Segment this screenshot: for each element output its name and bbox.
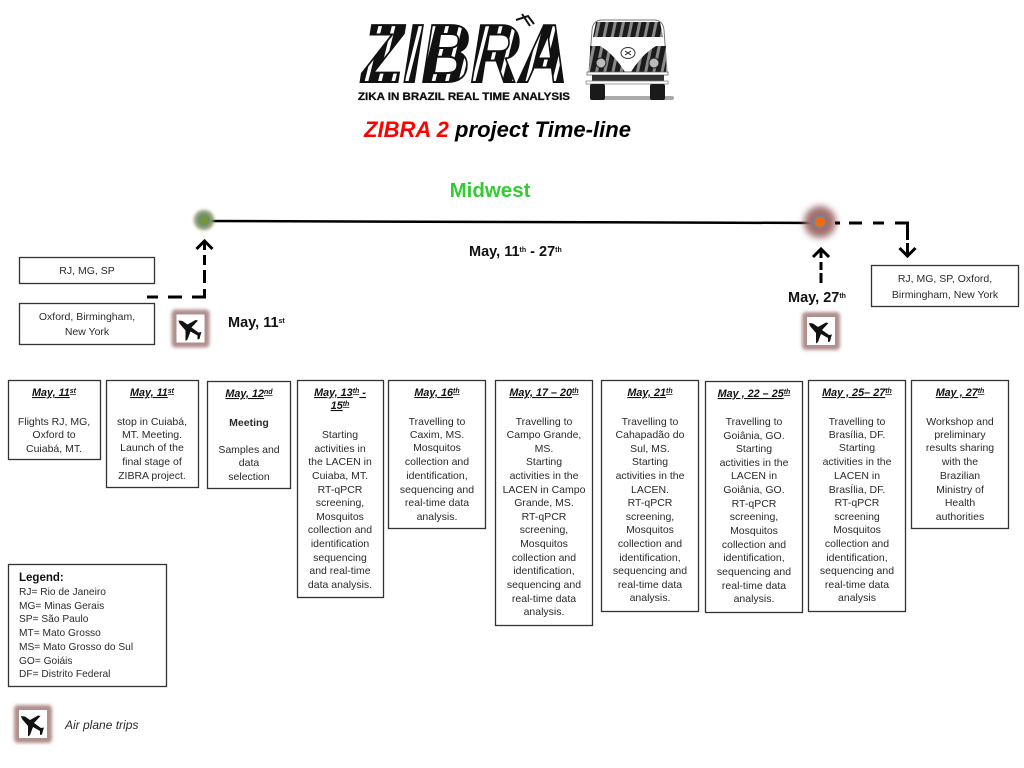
title: ZIBRA 2 project Time-line <box>363 117 631 142</box>
departure date: May, 27 <box>788 290 839 306</box>
panel: May 16: May, 16 <box>414 387 453 399</box>
panel: May 11 flights: Oxford to <box>32 429 76 441</box>
panel: May 11 stop: Launch of the <box>120 442 184 454</box>
panel: May 11 flights: st <box>70 388 77 395</box>
panel: May 16: Travelling to <box>409 416 466 428</box>
panel: May 25-27: sequencing and <box>820 565 894 577</box>
panel: May 13-15: RT-qPCR <box>318 484 363 496</box>
panel: May 16: identification, <box>406 470 468 482</box>
panel: May 13-15: sequencing <box>313 552 367 564</box>
panel: May 16 <box>388 380 486 528</box>
panel: May 13-15: 15 <box>331 400 343 412</box>
timeline date range: th <box>520 247 526 254</box>
panel: May 12 meeting: Samples and <box>218 444 280 456</box>
panel: May 16: analysis. <box>417 511 457 523</box>
panel: legend: MT= Mato Grosso <box>19 628 101 639</box>
panel: May 21: Cahapadão do <box>616 429 685 441</box>
panel: May 27 workshop: results sharing <box>926 442 994 454</box>
panel: May 21: real-time data <box>618 579 682 591</box>
panel: May 13-15: collection and <box>308 524 372 536</box>
panel: May 11 flights: May, 11 <box>32 387 70 399</box>
panel: May 22-25: Mosquitos <box>730 525 778 537</box>
panel: May 16: sequencing and <box>400 484 474 496</box>
panel: May 22-25: Goiânia, GO. <box>723 430 785 442</box>
box: return destinations: RJ, MG, SP, Oxford, <box>898 273 992 285</box>
panel: May 13-15: identification <box>311 538 369 550</box>
panel: May 13-15: and real-time <box>309 565 371 577</box>
panel: May 17-20: Starting <box>526 456 562 468</box>
panel: May 21: Travelling to <box>622 416 679 428</box>
panel: May 21: LACEN. <box>631 484 669 496</box>
panel: May 25-27: activities in the <box>823 456 892 468</box>
panel: May 16: th <box>453 388 460 395</box>
arrival date: May, 11 <box>228 315 279 331</box>
panel: May 22-25: Starting <box>736 443 772 455</box>
panel: May 13-15: May, 13 <box>314 387 353 399</box>
panel: May 16: Mosquitos <box>413 442 461 454</box>
panel: May 17-20: Campo Grande, <box>507 429 581 441</box>
panel: May 22-25: RT-qPCR <box>732 498 777 510</box>
panel: May 25-27: LACEN in <box>834 470 880 482</box>
timeline date range: May, 11 <box>469 244 520 260</box>
panel: May 11 stop: ZIBRA project. <box>118 470 186 482</box>
panel: May 12 meeting: selection <box>228 471 270 483</box>
box: Oxford, Birmingham, New York: New York <box>65 326 110 338</box>
panel: May 12 meeting: May, 12 <box>225 388 264 400</box>
timeline line <box>204 221 820 223</box>
panel: May 17-20: real-time data <box>512 593 576 605</box>
panel: May 27 workshop: with the <box>941 456 978 468</box>
panel: May 22-25: analysis. <box>734 593 774 605</box>
panel: May 13-15: the LACEN in <box>308 456 372 468</box>
panel: May 17-20: MS. <box>535 443 553 455</box>
panel: May 21: identification, <box>619 552 681 564</box>
panel: May 17-20: collection and <box>512 552 576 564</box>
panel: May 25-27: Brasília, DF. <box>829 429 885 441</box>
panel: May 25-27: Travelling to <box>829 416 886 428</box>
panel: May 21: Starting <box>632 456 668 468</box>
panel: May 27 workshop: preliminary <box>934 429 986 441</box>
panel: May 12 meeting: Meeting <box>229 417 269 429</box>
panel: May 27 workshop: Ministry of <box>936 484 984 496</box>
panel: May 11 flights <box>8 380 100 460</box>
panel: May 17-20: analysis. <box>524 606 564 618</box>
panel: May 25-27: real-time data <box>825 579 889 591</box>
panel: May 11 stop: MT. Meeting. <box>122 429 182 441</box>
panel: May 17-20: identification, <box>513 565 575 577</box>
panel: May 11 stop: final stage of <box>122 456 182 468</box>
panel: May 25-27: Starting <box>839 442 875 454</box>
panel: May 22-25: activities in the <box>720 457 789 469</box>
panel: May 22-25: sequencing and <box>717 566 791 578</box>
logo: ZIBRA wordmark: ZIBRA <box>360 7 568 100</box>
panel: May 25-27: collection and <box>825 538 889 550</box>
arrow: departure flight <box>835 223 916 256</box>
panel: May 11 flights: Flights RJ, MG, <box>18 416 90 428</box>
panel: legend: MS= Mato Grosso do Sul <box>19 642 133 653</box>
panel: May 17-20: Grande, MS. <box>514 497 574 509</box>
panel: May 11 stop: st <box>168 388 175 395</box>
box: RJ, MG, SP: RJ, MG, SP <box>59 265 115 277</box>
panel: May 27 workshop: May , 27 <box>936 387 978 399</box>
panel: May 22-25: LACEN in <box>731 470 777 482</box>
panel: May 21: activities in the <box>616 470 685 482</box>
panel: legend: GO= Goiáis <box>19 656 73 667</box>
panel: May 17-20: activities in the <box>510 470 579 482</box>
panel: May 21: screening, <box>626 511 674 523</box>
panel: May 25-27: identification, <box>826 552 888 564</box>
box: return destinations: Birmingham, New York <box>892 289 999 301</box>
panel: legend: DF= Distrito Federal <box>19 669 110 680</box>
panel: May 22-25: Travelling to <box>726 416 783 428</box>
panel: May 13-15: th <box>353 388 359 395</box>
arrow: arrival flight <box>147 241 212 297</box>
panel: May 17-20: May, 17 – 20 <box>509 387 572 399</box>
panel: May 16: real-time data <box>405 497 469 509</box>
icon: striped van <box>586 20 674 100</box>
timeline date range: - 27 <box>526 244 555 260</box>
panel: May 27 workshop: Brazilian <box>940 470 980 482</box>
panel: May 13-15: Mosquitos <box>316 511 364 523</box>
panel: legend <box>8 564 166 686</box>
timeline start node <box>194 210 214 230</box>
panel: May 11 stop <box>106 380 198 488</box>
box: return destinations <box>872 266 1018 306</box>
panel: May 22-25: identification, <box>723 552 785 564</box>
panel: May 17-20 <box>496 380 592 626</box>
icon: plane arrival <box>172 310 210 348</box>
timeline end node <box>804 206 836 238</box>
panel: May 17-20: th <box>572 388 579 395</box>
panel: legend: RJ= Rio de Janeiro <box>19 587 106 598</box>
panel: May 27 workshop: Workshop and <box>926 416 994 428</box>
panel: May 17-20: LACEN in Campo <box>503 484 586 496</box>
panel: May 22-25: th <box>784 389 790 396</box>
panel: May 11 stop: stop in Cuiabá, <box>117 416 187 428</box>
panel: May 25-27: RT-qPCR <box>835 497 880 509</box>
panel: May 16: Caxim, MS. <box>410 429 464 441</box>
panel: May 11 flights: Cuiabá, MT. <box>26 443 82 455</box>
panel: May 11 stop: May, 11 <box>130 387 168 399</box>
icon: plane departure <box>802 312 840 350</box>
panel: May 13-15: th <box>343 401 349 408</box>
box: Oxford, Birmingham, New York: Oxford, Birmingham, <box>39 311 135 323</box>
logo: ZIBRA wordmark: ZIKA IN BRAZIL REAL TIME ANALYSIS <box>358 91 570 103</box>
panel: May 17-20: sequencing and <box>507 579 581 591</box>
panel: May 27 workshop: authorities <box>936 511 984 523</box>
panel: May 21 <box>602 380 698 612</box>
panel: May 25-27: May , 25– 27 <box>822 387 885 399</box>
panel: May 25-27: BrasÍlia, DF. <box>829 483 885 496</box>
panel: May 22-25: real-time data <box>722 580 786 592</box>
panel: May 21: Mosquitos <box>626 524 674 536</box>
panel: May 21: Sul, MS. <box>630 443 670 455</box>
panel: May 21: May, 21 <box>627 387 666 399</box>
panel: May 27 workshop: th <box>978 388 984 395</box>
panel: May 17-20: screening, <box>520 524 568 536</box>
panel: May 12 meeting <box>208 382 290 488</box>
panel: May 17-20: Mosquitos <box>520 538 568 550</box>
panel: May 13-15: Cuiaba, MT. <box>312 470 368 482</box>
box: RJ, MG, SP <box>20 258 154 284</box>
arrow: departure up <box>813 249 829 283</box>
panel: May 13-15: - <box>359 387 366 399</box>
panel: May 27 workshop: Health <box>945 497 975 509</box>
icon: plane legend <box>14 705 52 743</box>
panel: May 25-27: Mosquitos <box>833 524 881 536</box>
box: Oxford, Birmingham, New York <box>20 304 154 344</box>
panel: May 22-25: collection and <box>722 539 786 551</box>
panel: May 21: analysis. <box>630 592 670 604</box>
panel: May 22-25: May , 22 – 25 <box>718 388 784 400</box>
departure date: th <box>839 293 846 300</box>
panel: May 13-15: Starting <box>322 429 358 441</box>
panel: May 13-15: data analysis. <box>308 579 372 591</box>
panel: legend: SP= São Paulo <box>19 614 89 625</box>
panel: May 13-15 <box>298 380 384 598</box>
panel: May 21: RT-qPCR <box>628 497 673 509</box>
panel: May 22-25: Goiânia, GO. <box>723 484 785 496</box>
panel: May 17-20: RT-qPCR <box>522 511 567 523</box>
panel: May 13-15: screening, <box>316 497 364 509</box>
panel: May 21: collection and <box>618 538 682 550</box>
panel: May 13-15: activities in <box>314 443 366 455</box>
panel: May 12 meeting: nd <box>264 389 273 396</box>
panel: May 22-25: screening, <box>730 511 778 523</box>
panel: May 25-27: screening <box>834 511 880 523</box>
panel: May 27 workshop <box>912 380 1008 528</box>
heading: Midwest: Midwest <box>450 179 531 202</box>
panel: May 12 meeting: data <box>239 457 259 469</box>
panel: May 25-27 <box>808 380 906 612</box>
panel: May 25-27: analysis <box>838 592 876 604</box>
panel: May 21: sequencing and <box>613 565 687 577</box>
legend label: air plane trips: Air plane trips <box>64 718 138 732</box>
panel: May 22-25 <box>706 382 802 612</box>
panel: May 25-27: th <box>885 388 892 395</box>
panel: legend: MG= Minas Gerais <box>19 601 104 612</box>
panel: legend: Legend: <box>19 572 64 584</box>
timeline date range: th <box>555 247 562 254</box>
panel: May 17-20: Travelling to <box>516 416 573 428</box>
panel: May 21: th <box>666 388 673 395</box>
arrival date: st <box>279 318 285 325</box>
panel: May 16: collection and <box>405 456 469 468</box>
